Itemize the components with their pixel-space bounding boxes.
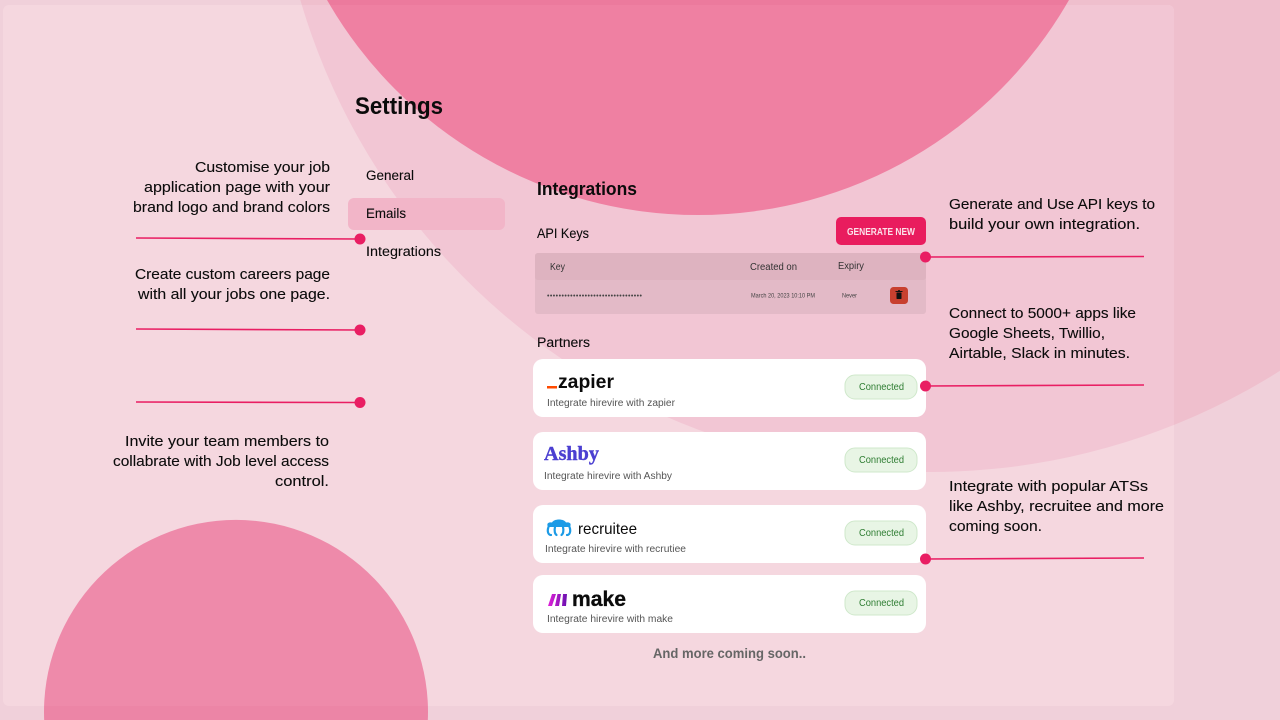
ashby description: Integrate hirevire with Ashby — [544, 471, 672, 482]
partners heading: Partners — [537, 335, 590, 350]
masked key: ••••••••••••••••••••••••••••••••• — [547, 293, 643, 300]
logo: ashby: Ashby — [544, 443, 599, 465]
zapier description: Integrate hirevire with zapier — [547, 398, 676, 409]
table row — [535, 253, 926, 314]
connector: team members — [136, 397, 366, 408]
right callout: api keys: build your own integration. — [949, 216, 1140, 233]
left callout: job application page: application page with your — [144, 179, 330, 196]
right callout: ats integrations: coming soon. — [949, 518, 1042, 535]
left callout: job application page — [133, 159, 330, 216]
top pink circle — [327, 0, 1069, 215]
app panel — [306, 5, 1174, 432]
left callout: team members — [113, 433, 329, 490]
left callout: team members: collabrate with Job level access — [113, 453, 329, 470]
bottom left pink circle — [44, 520, 428, 720]
ashby status: Connected — [859, 455, 904, 466]
right callout: ats integrations: like Ashby, recruitee and more — [949, 498, 1164, 515]
nav item: general: General — [366, 168, 414, 183]
zapier status — [845, 375, 917, 399]
right callout: ats integrations — [949, 478, 1164, 535]
left callout: careers page: Create custom careers page — [135, 266, 330, 283]
nav item: integrations: Integrations — [366, 244, 441, 259]
connector: careers page — [136, 324, 366, 336]
api keys table — [535, 253, 926, 314]
logo: make: make — [572, 588, 626, 611]
right callout: connect apps: Google Sheets, Twillio, — [949, 325, 1105, 342]
recruitee status: Connected — [859, 528, 904, 539]
partner card: recruitee — [533, 505, 926, 563]
connector: connect apps — [920, 380, 1144, 392]
generate new button — [836, 217, 926, 245]
table header — [535, 253, 926, 280]
make status: Connected — [859, 598, 904, 609]
settings title: Settings — [355, 93, 443, 120]
right callout: ats integrations: Integrate with popular ATSs — [949, 478, 1148, 495]
connector: job application page — [136, 234, 366, 244]
left callout: team members: Invite your team members to — [125, 433, 329, 450]
right callout: api keys: Generate and Use API keys to — [949, 196, 1155, 213]
ashby status — [845, 448, 917, 472]
recruitee status — [845, 521, 917, 545]
generate new button: GENERATE NEW — [847, 227, 915, 238]
partner card: ashby — [533, 432, 926, 490]
zapier status: Connected — [859, 382, 904, 393]
api keys heading: API Keys — [537, 226, 589, 241]
make status — [845, 591, 917, 615]
active nav highlight — [348, 198, 505, 230]
left callout: job application page: Customise your job — [195, 159, 330, 176]
settings navigation — [348, 168, 505, 259]
integrations heading: Integrations — [537, 179, 637, 199]
created date: March 20, 2023 10:10 PM — [751, 294, 815, 300]
connector: ats integrations — [920, 554, 1144, 564]
partner card: make — [533, 575, 926, 633]
icon: delete — [890, 287, 908, 304]
right callout: api keys — [949, 196, 1155, 233]
more coming soon note: And more coming soon.. — [653, 645, 806, 661]
make description: Integrate hirevire with make — [547, 614, 673, 625]
right callout: connect apps: Connect to 5000+ apps like — [949, 305, 1136, 322]
left callout: careers page: with all your jobs one page. — [137, 286, 330, 303]
column: expiry: Expiry — [838, 261, 864, 272]
left callout: careers page — [135, 266, 330, 303]
logo: recruitee — [547, 520, 637, 538]
connector: api keys — [920, 252, 1144, 262]
right callout: connect apps: Airtable, Slack in minutes. — [949, 345, 1130, 362]
expiry value: Never — [842, 294, 857, 300]
large pale circle — [300, 0, 1280, 472]
left callout: team members: control. — [275, 473, 329, 490]
nav item: emails: Emails — [366, 206, 406, 221]
partner card: zapier — [533, 359, 926, 417]
column: key: Key — [550, 262, 565, 273]
logo: make — [548, 588, 626, 611]
left callout: job application page: brand logo and brand colors — [133, 199, 330, 216]
recruitee description: Integrate hirevire with recrutiee — [545, 544, 686, 555]
column: created on: Created on — [750, 262, 797, 273]
logo: recruitee: recruitee — [578, 521, 637, 538]
logo: zapier: zapier — [558, 372, 615, 393]
right callout: connect apps — [949, 305, 1136, 362]
